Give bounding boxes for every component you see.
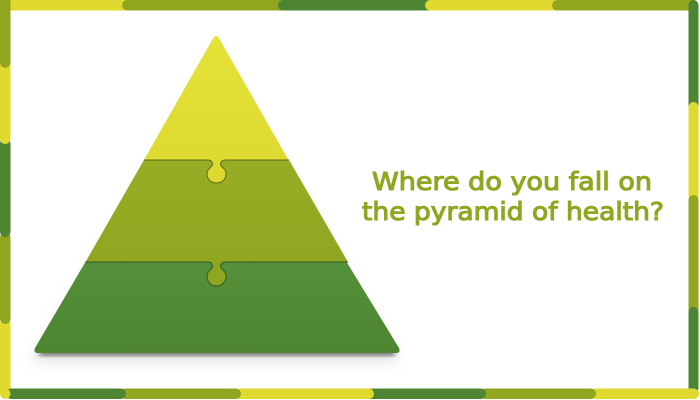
puzzle seam: upper (144, 160, 288, 183)
frame: bottom band (6, 388, 699, 399)
heading line 2: the pyramid of health? (362, 197, 664, 226)
heading line 1: Where do you fall on (372, 167, 652, 196)
frame: left band (0, 0, 10, 398)
frame: top band (6, 0, 698, 10)
heading: question (362, 167, 664, 226)
frame: right band (688, 0, 698, 393)
tier: bottom green (34, 261, 400, 353)
tier: middle olive (86, 159, 348, 286)
pyramid soft glow (30, 60, 400, 362)
pyramid shadow (38, 348, 396, 356)
tier: top yellow (144, 36, 288, 183)
pyramid: three puzzle tiers (30, 36, 400, 362)
puzzle seam: lower (86, 262, 348, 286)
